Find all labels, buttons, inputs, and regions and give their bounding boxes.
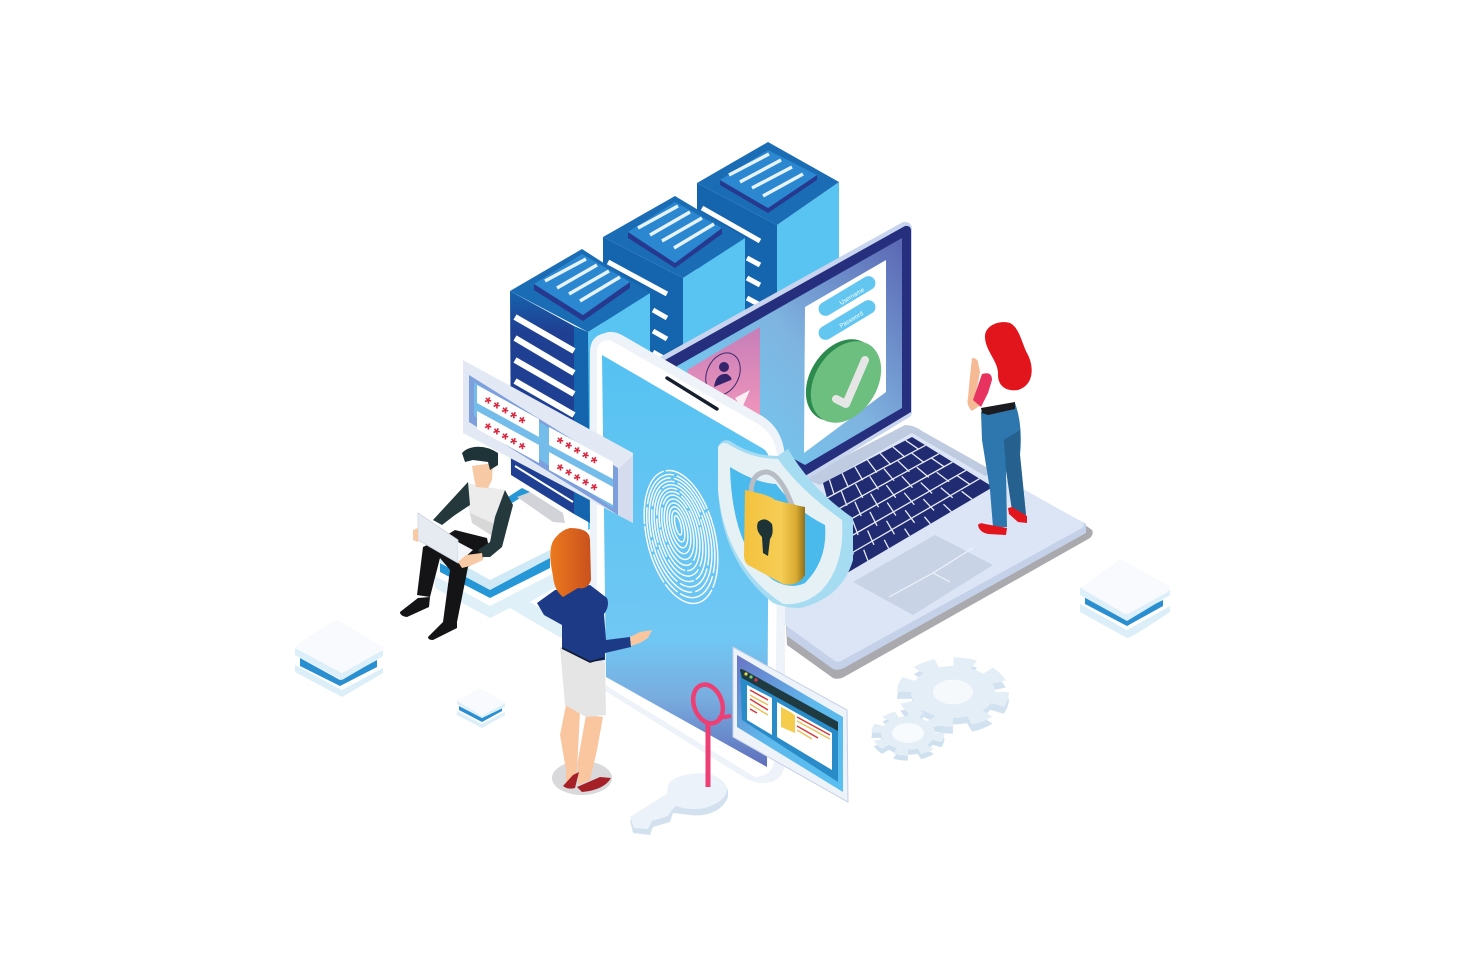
man: trousers	[417, 530, 490, 622]
window: left content card	[747, 685, 772, 735]
field: password: Password	[839, 311, 865, 330]
window: right content card	[777, 702, 832, 770]
man: torso	[466, 483, 505, 537]
woman: hand	[630, 630, 652, 646]
woman: hair	[550, 528, 591, 597]
icon: fingerprint	[632, 463, 730, 611]
password row 2	[477, 411, 539, 463]
man: hands	[413, 528, 483, 568]
illustration: isometric data security scene	[295, 142, 1170, 835]
password row 3	[549, 427, 613, 479]
password row 2: *****	[479, 419, 531, 460]
padlock body	[744, 490, 805, 585]
red woman: shoes	[978, 507, 1027, 535]
phone: body and screen	[590, 332, 785, 783]
woman: jacket	[537, 585, 631, 662]
red woman: jeans	[981, 403, 1026, 527]
window: title bar	[740, 669, 838, 731]
woman: shoes	[563, 772, 611, 792]
woman: floor shadow	[552, 761, 612, 795]
woman: skirt	[560, 647, 606, 717]
password row 1: *****	[479, 393, 531, 434]
icon: large gear	[905, 662, 1001, 729]
red woman: hair	[985, 322, 1032, 390]
field: password	[816, 298, 878, 342]
icon: pink location pin	[688, 680, 731, 787]
block: small floating tile	[457, 688, 505, 728]
person: man sitting with laptop	[400, 447, 513, 640]
screen: pink profile panel	[687, 327, 760, 417]
block: right floating tile	[1080, 560, 1170, 638]
person: woman with orange hair	[537, 528, 652, 795]
password row 3: *****	[551, 433, 603, 474]
red woman: forearm and hand	[968, 358, 982, 411]
laptop: screen	[660, 222, 912, 480]
phone: speaker slot	[667, 378, 717, 409]
padlock keyhole	[757, 519, 773, 556]
red woman: face	[986, 338, 997, 356]
padlock shackle	[751, 472, 795, 514]
person: woman with red hair	[968, 322, 1032, 535]
panel: browser window card	[733, 647, 848, 802]
laptop: base	[780, 425, 1093, 679]
server: back tower	[697, 142, 839, 400]
password row 4: *****	[551, 460, 603, 501]
password row 4	[549, 452, 613, 505]
field: username	[816, 274, 878, 318]
man: shoes	[400, 597, 457, 640]
laptop: trackpad	[853, 535, 993, 615]
block: left floating tile	[295, 620, 383, 697]
icon: security shield with padlock	[718, 440, 853, 608]
man: head	[462, 447, 498, 488]
icon: key lying on the ground	[630, 773, 728, 835]
woman: legs	[560, 705, 603, 786]
laptop: keyboard	[823, 437, 993, 573]
server: front tower	[510, 249, 650, 530]
panel: password fields	[463, 360, 633, 523]
field: username: Username	[839, 287, 866, 307]
man: arms	[433, 482, 513, 557]
icon: small gear	[877, 714, 939, 757]
server: middle tower	[603, 196, 745, 450]
red woman: sleeve	[973, 373, 992, 407]
icon: green check badge	[791, 326, 896, 436]
screen: white login panel	[791, 260, 896, 453]
platform: server base	[435, 488, 600, 655]
red woman: belt	[981, 402, 1015, 415]
password row 1	[477, 385, 539, 437]
man: laptop	[418, 513, 473, 563]
